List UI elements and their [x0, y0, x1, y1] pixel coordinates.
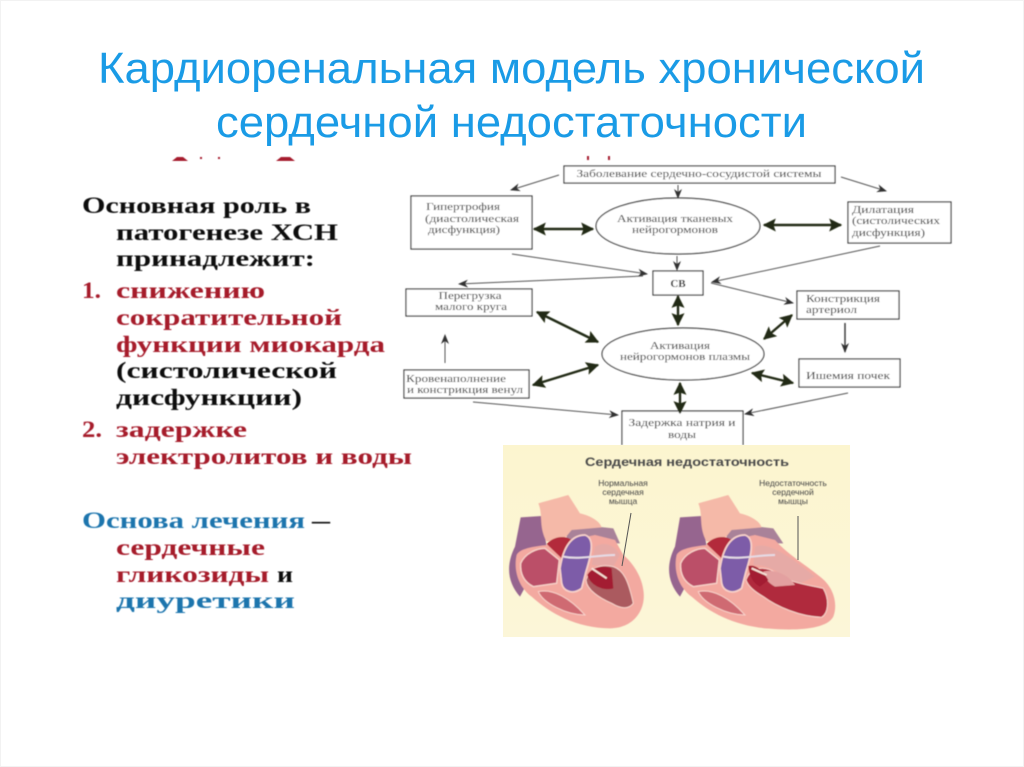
arrow: venous filling to retention: [473, 402, 618, 415]
text block: main role: [82, 193, 338, 271]
box: venous filling and constriction: и констрикция венул: [407, 384, 524, 396]
text block: treatment basis: –: [310, 508, 331, 533]
box: cardiac output: [653, 271, 703, 295]
text block: treatment basis: сердечные: [116, 535, 265, 560]
label: normal heart muscle: Нормальная: [598, 478, 648, 488]
label: normal heart muscle: мышца: [609, 496, 637, 506]
left text panel: pathogenesis and treatment: [82, 193, 412, 613]
double arrow: plasma neurohormones and retention: [679, 383, 681, 413]
double arrow: plasma neurohormones and ischemia: [752, 373, 793, 383]
list item 1: (систолической: [116, 358, 337, 383]
list item 1: 1.: [82, 278, 101, 303]
title: [98, 44, 925, 147]
arrow: disease to dilation: [841, 177, 886, 191]
panel: heart failure illustration: [503, 445, 850, 637]
box: pulmonary overload: Перегрузка: [438, 290, 502, 302]
double arrow: constriction and plasma neurohormones: [764, 315, 792, 339]
double arrow: tissue neurohormones and dilation: [764, 224, 841, 226]
leader line: failing heart: [797, 516, 799, 560]
ellipse: plasma neurohormones: Активация: [650, 340, 710, 352]
arrow: output to constriction: [711, 283, 793, 303]
box: dilation: дисфункция): [852, 227, 925, 239]
box: dilation: (систолических: [852, 215, 941, 227]
cropped red heading fragments: [172, 156, 610, 161]
box: pulmonary overload: малого круга: [435, 301, 507, 313]
box: pulmonary overload: [406, 289, 532, 316]
list item 1: снижению: [116, 278, 265, 303]
arrow: output to pulmonary overload: [459, 276, 643, 284]
box: sodium and water retention: [622, 411, 743, 445]
list item 2: электролитов и воды: [116, 444, 412, 469]
title: сердечной недостаточности: [216, 98, 807, 147]
double arrow: venous filling and plasma neurohormones: [533, 365, 598, 385]
box: arteriole constriction: артериол: [806, 304, 858, 316]
box: venous filling and constriction: [404, 370, 529, 398]
label: failing heart muscle: сердечной: [772, 487, 814, 497]
text block: treatment basis: гликозиды: [116, 562, 269, 587]
arrow: tissue neurohormones to output: [676, 256, 678, 270]
box: venous filling and constriction: Кровенаполнение: [406, 373, 506, 385]
double arrow: hypertrophy and tissue neurohormones: [534, 228, 593, 230]
ellipse: plasma neurohormones: [602, 328, 764, 380]
label: normal heart muscle: сердечная: [602, 487, 644, 497]
text block: main role: принадлежит:: [116, 246, 315, 271]
box: dilation: [848, 202, 951, 243]
box: renal ischemia: [799, 359, 900, 387]
label: failing heart muscle: [759, 478, 827, 506]
text block: treatment basis: [82, 508, 331, 613]
arrow: dilation to output: [712, 246, 880, 282]
arrow: disease to hypertrophy: [511, 175, 559, 190]
box: hypertrophy: дисфункция): [428, 224, 500, 236]
box: renal ischemia: Ишемия почек: [806, 370, 891, 382]
illustration: normal heart: [509, 495, 644, 628]
double arrow: pulmonary overload and plasma neurohormones: [537, 312, 598, 342]
leader line: normal heart: [622, 513, 631, 566]
box: arteriole constriction: Констрикция: [806, 293, 880, 305]
ellipse: tissue neurohormones: нейрогормонов: [632, 224, 718, 236]
list item 2: задержке: [116, 417, 247, 442]
text block: treatment basis: диуретики: [116, 588, 295, 613]
arrow: disease to tissue neurohormones: [677, 185, 679, 198]
flow diagram: cardiorenal model: [404, 166, 951, 445]
arrow: venous filling to pulmonary overload: [444, 335, 446, 363]
label: failing heart muscle: Недостаточность: [759, 478, 827, 488]
double arrow: output and plasma neurohormones: [677, 296, 679, 325]
box: cardiovascular disease: Заболевание сердечно-сосудистой системы: [576, 168, 822, 180]
ellipse: tissue neurohormones: [596, 198, 760, 254]
arrow: ischemia to retention: [745, 393, 848, 414]
box: sodium and water retention: Задержка натрия и: [628, 417, 736, 429]
box: sodium and water retention: воды: [668, 429, 697, 441]
ellipse: tissue neurohormones: Активация тканевых: [617, 213, 734, 225]
box: dilation: Дилатация: [852, 204, 914, 216]
arrow: hypertrophy to output: [512, 254, 647, 274]
illustration: failing heart: [669, 495, 835, 629]
ellipse: plasma neurohormones: нейрогормонов плазмы: [620, 351, 751, 363]
box: cardiac output: СВ: [670, 278, 686, 290]
list item 2: 2.: [82, 417, 102, 442]
list item 1: дисфункции): [116, 385, 302, 410]
box: hypertrophy: (диастолическая: [425, 213, 519, 225]
label: normal heart muscle: [598, 478, 648, 506]
list item 1: сократительной: [116, 305, 342, 330]
text block: main role: патогенезе ХСН: [116, 220, 338, 245]
text block: main role: Основная роль в: [82, 193, 311, 218]
list item 1: функции миокарда: [116, 332, 386, 357]
box: cardiovascular disease: [564, 166, 835, 183]
box: hypertrophy: Гипертрофия: [426, 201, 500, 213]
label: failing heart muscle: мышцы: [778, 496, 808, 506]
list item 1: [82, 278, 386, 410]
panel heading: Сердечная недостаточность: [585, 457, 789, 469]
list item 2: [82, 417, 412, 469]
text block: treatment basis: и: [277, 562, 293, 587]
arrow: constriction to ischemia: [844, 323, 846, 352]
box: hypertrophy: [411, 196, 532, 249]
title: Кардиоренальная модель хронической: [98, 44, 925, 93]
box: arteriole constriction: [797, 291, 899, 319]
text block: treatment basis: Основа лечения: [82, 508, 305, 533]
